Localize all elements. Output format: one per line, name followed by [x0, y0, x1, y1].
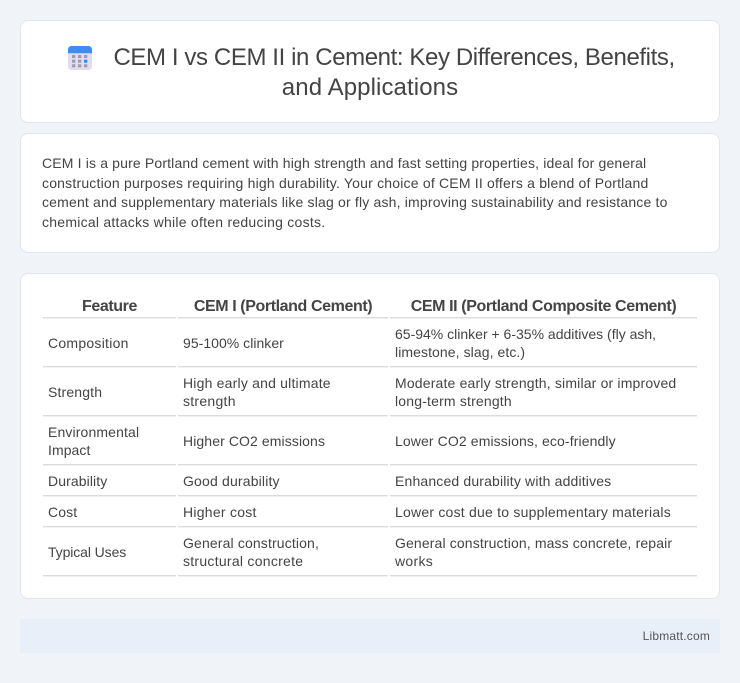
panel: introduction	[20, 133, 720, 253]
Durability: CEM I: Good durability	[183, 473, 280, 489]
row: Strength: Strength	[48, 384, 102, 400]
Strength: CEM II: Moderate early strength, similar or improved	[395, 375, 676, 391]
Environmental Impact: CEM I: Higher CO2 emissions	[183, 433, 325, 449]
row: Typical Uses: Typical Uses	[48, 544, 126, 560]
Typical Uses: CEM II: General construction, mass concrete, repair	[395, 535, 672, 551]
Environmental Impact: CEM II: Lower CO2 emissions, eco-friendly	[395, 433, 616, 449]
panel: comparison table	[20, 273, 720, 599]
panel: title header	[20, 20, 720, 123]
Typical Uses: CEM I: structural concrete	[183, 553, 303, 569]
Strength: CEM I: strength	[183, 393, 236, 409]
intro text: CEM I is a pure Portland cement with high strength and fast setting properties, ideal for general	[42, 155, 646, 171]
row: Cost: Cost	[48, 504, 77, 520]
table header: CEM II: CEM II (Portland Composite Cement)	[411, 298, 676, 315]
icon: calendar	[68, 46, 92, 70]
Composition: CEM II	[395, 326, 656, 360]
Strength: CEM I: High early and ultimate	[183, 375, 331, 391]
footer bar	[20, 619, 720, 653]
Typical Uses: CEM II: works	[395, 553, 433, 569]
Cost: CEM II: Lower cost due to supplementary materials	[395, 504, 671, 520]
intro text: chemical attacks while often reducing costs.	[42, 214, 325, 230]
Typical Uses: CEM II	[395, 535, 672, 569]
intro text: cement and supplementary materials like slag or fly ash, improving sustainability and resistance to	[42, 194, 668, 210]
Composition: CEM II: 65-94% clinker + 6-35% additives (fly ash,	[395, 326, 656, 342]
Strength: CEM II	[395, 375, 676, 409]
intro text	[42, 155, 668, 230]
Composition: CEM II: limestone, slag, etc.)	[395, 344, 525, 360]
Durability: CEM II: Enhanced durability with additives	[395, 473, 611, 489]
Strength: CEM I	[183, 375, 331, 409]
row: Composition: Composition	[48, 335, 129, 351]
intro text: construction purposes requiring high durability. Your choice of CEM II offers a blend of Portland	[42, 174, 648, 190]
Strength: CEM II: long-term strength	[395, 393, 512, 409]
Typical Uses: CEM I	[183, 535, 319, 569]
footer text: Libmatt.com	[643, 629, 710, 643]
row: Environmental Impact: Environmental	[48, 424, 139, 440]
row: Durability: Durability	[48, 473, 107, 489]
Cost: CEM I: Higher cost	[183, 504, 257, 520]
title: and Applications	[282, 74, 458, 101]
Typical Uses: CEM I: General construction,	[183, 535, 319, 551]
row: Environmental Impact	[48, 424, 139, 458]
Composition: CEM I: 95-100% clinker	[183, 335, 284, 351]
title: CEM I vs CEM II in Cement: Key Differences, Benefits,	[114, 44, 675, 71]
title	[114, 44, 675, 101]
table header: CEM I: CEM I (Portland Cement)	[194, 298, 372, 315]
row: Environmental Impact: Impact	[48, 442, 90, 458]
table header: Feature: Feature	[82, 298, 137, 315]
